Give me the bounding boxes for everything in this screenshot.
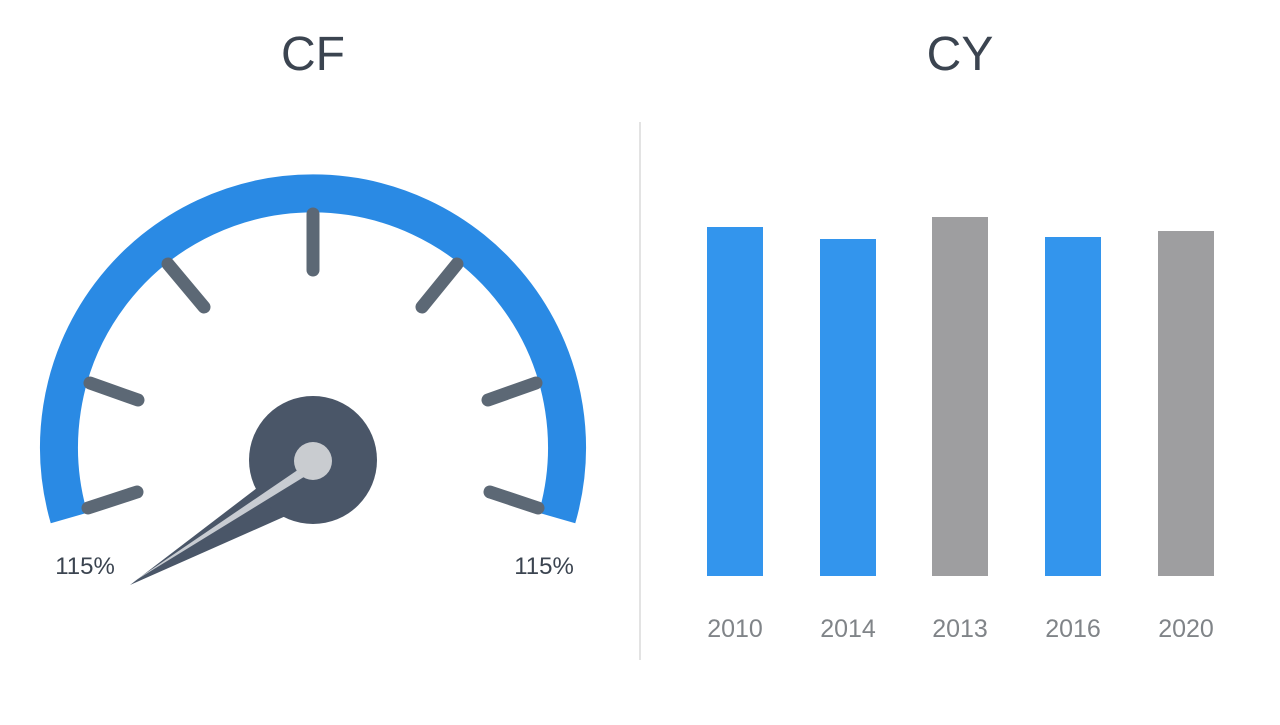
- gauge ticks: [88, 214, 538, 508]
- gauge: [55, 193, 574, 585]
- gauge: 115%: [514, 553, 574, 580]
- x-axis labels: 2020: [1158, 615, 1214, 643]
- divider: [639, 122, 641, 660]
- x-axis labels: 2014: [820, 615, 876, 643]
- bar chart: [707, 217, 1214, 643]
- x-axis labels: 2010: [707, 615, 763, 643]
- title: CF: CF: [281, 28, 345, 81]
- x-axis labels: [707, 615, 1214, 643]
- x-axis labels: 2013: [932, 615, 988, 643]
- gauge arc: [59, 193, 567, 518]
- x-axis labels: 2016: [1045, 615, 1101, 643]
- gauge needle: [130, 396, 377, 585]
- title: CY: CY: [927, 28, 993, 81]
- gauge labels: 115%: [55, 553, 115, 580]
